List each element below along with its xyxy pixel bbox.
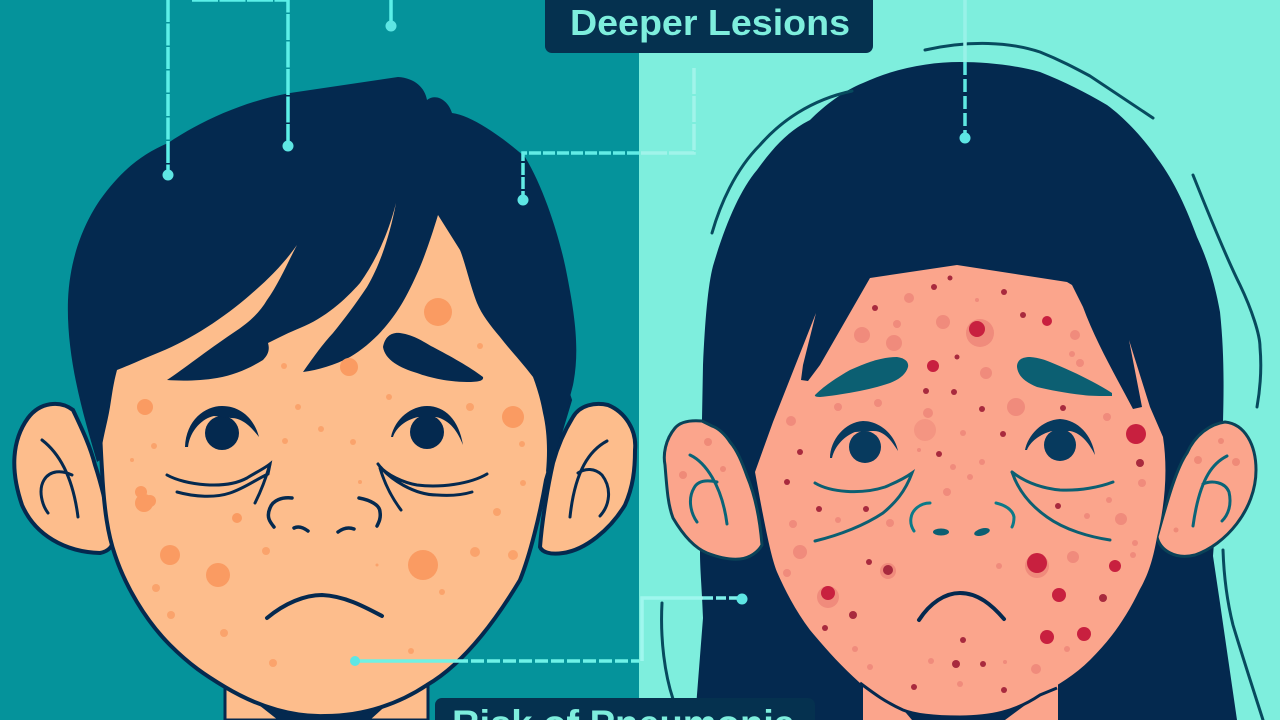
left brow — [815, 357, 908, 397]
mouth — [267, 595, 382, 618]
hair — [68, 77, 576, 472]
icon: left ear — [664, 421, 762, 559]
under-eye lines — [167, 464, 487, 510]
label: Risk of Pneumonia — [435, 698, 815, 720]
right brow — [1017, 357, 1112, 396]
figure: girl with severe acne — [662, 43, 1263, 720]
panel: left teal background — [0, 0, 639, 720]
red spots — [784, 276, 1146, 693]
panel: right mint background — [639, 0, 1280, 720]
left eye — [185, 406, 259, 450]
neck — [225, 680, 428, 720]
right eye — [391, 406, 463, 449]
pale spots — [783, 293, 1146, 687]
face — [95, 190, 570, 716]
face — [755, 265, 1165, 717]
icon: right ear — [1157, 422, 1256, 556]
callout lines and dots — [162, 0, 970, 666]
neck — [863, 680, 1058, 720]
left eye — [830, 421, 898, 463]
label: Deeper Lesions — [545, 0, 873, 53]
loose hair strands — [662, 43, 1263, 720]
brow — [383, 333, 483, 382]
nose — [268, 498, 380, 532]
under-eye lines — [815, 472, 1113, 541]
right eye — [1025, 419, 1095, 461]
nose — [911, 503, 1014, 537]
label: Deeper Lesions: Deeper Lesions — [570, 2, 850, 43]
chin line — [860, 683, 1057, 717]
long hair — [695, 62, 1237, 720]
figure: boy with mild acne — [14, 77, 635, 720]
acne spots — [130, 298, 526, 667]
icon: left ear — [14, 404, 113, 553]
icon: right ear — [540, 404, 635, 554]
mouth — [919, 593, 1004, 620]
